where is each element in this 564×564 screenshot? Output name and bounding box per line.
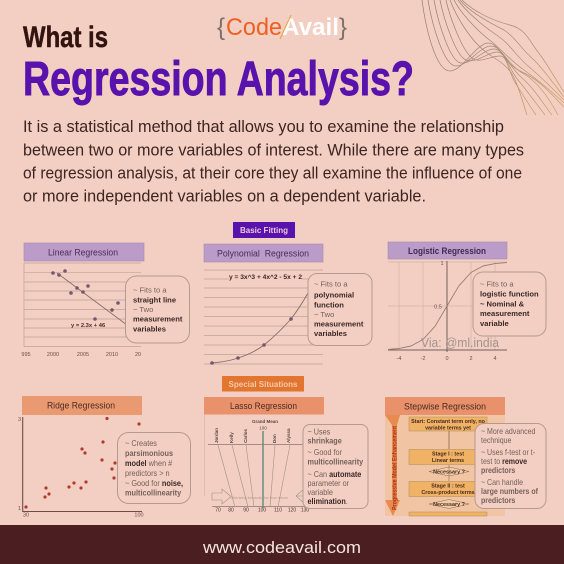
logo: CodeAvail: } xyxy=(339,14,347,41)
callout: stepwise: predictors xyxy=(481,466,515,475)
heading: stepwise regression: Stepwise Regression xyxy=(404,402,486,412)
sigmoid chart: logistic: 1 xyxy=(440,261,444,267)
logo: CodeAvail xyxy=(217,14,347,41)
intro paragraph: of regression analysis, at their core they all examine the influence of one xyxy=(23,164,522,182)
callout: ridge: predictors > n xyxy=(125,469,170,478)
forest-style chart: lasso: Alyssa xyxy=(286,428,291,443)
curve chart: polynomial xyxy=(204,270,323,365)
panel: linear regression xyxy=(21,243,190,358)
forest-style chart: lasso: 90 xyxy=(243,508,249,514)
callout: polynomial: function xyxy=(314,300,344,310)
sigmoid chart: logistic: 2 xyxy=(469,356,473,362)
panel: ridge regression xyxy=(18,396,190,518)
callout: stepwise: predictors xyxy=(481,496,515,505)
callout: logistic xyxy=(473,272,546,336)
flowchart backdrop: stepwise: Cross-product terms xyxy=(421,490,475,496)
forest-style chart: lasso xyxy=(204,414,309,514)
callout: polynomial: ~ Fits to a xyxy=(314,280,348,288)
flowchart backdrop: stepwise: variable terms yet xyxy=(425,426,471,432)
callout: linear: measurement xyxy=(133,314,183,324)
scatter chart: linear: 20 xyxy=(135,352,141,358)
logo: CodeAvail: Avail xyxy=(282,14,339,41)
forest-style chart: lasso: Don xyxy=(272,434,277,443)
footer band xyxy=(0,525,564,564)
heading: polynomial regression xyxy=(204,244,323,262)
sigmoid chart: logistic: 4 xyxy=(493,356,497,362)
curve chart: polynomial: y = 3x^3 + 4x^2 - 5x + 2 xyxy=(229,274,303,281)
scatter chart: linear: 995 xyxy=(21,352,31,358)
forest-style chart: lasso: Carlos xyxy=(243,428,248,443)
scatter chart: linear: y = 2.3x + 46 xyxy=(71,323,106,329)
heading: ridge regression xyxy=(22,396,142,415)
callout: ridge: ~ Creates xyxy=(125,439,157,448)
forest-style chart: lasso: 120 xyxy=(288,508,296,514)
forest-style chart: lasso: 100 xyxy=(258,508,266,514)
sigmoid chart: logistic: 0 xyxy=(445,356,449,362)
flowchart backdrop: stepwise: Linear terms xyxy=(432,458,464,464)
callout: lasso: variable xyxy=(308,488,333,497)
callout: ridge xyxy=(118,432,190,504)
panel: stepwise regression xyxy=(385,397,546,516)
heading: linear regression xyxy=(24,243,144,261)
forest-style chart: lasso: 70 xyxy=(215,508,221,514)
callout: ridge: multicollinearity xyxy=(125,488,182,498)
callout: lasso: parameter or xyxy=(308,479,349,488)
watermark: Via @ml.india: Via: @ml.india xyxy=(421,336,499,350)
callout: stepwise xyxy=(475,424,546,508)
callout: polynomial: variables xyxy=(314,329,347,338)
callout: linear xyxy=(126,276,190,343)
flowchart backdrop: stepwise: Necessary ? xyxy=(433,502,465,508)
forest-style chart: lasso: 130 xyxy=(301,508,309,514)
intro paragraph: between two or more variables of interest. While there are many types xyxy=(23,142,524,160)
flowchart backdrop: stepwise: Necessary ? xyxy=(433,470,465,476)
callout: logistic: ~ Fits to a xyxy=(480,280,514,288)
forest-style chart: lasso: Grand Mean xyxy=(252,419,278,424)
logo: CodeAvail: Code xyxy=(226,14,282,41)
forest-style chart: lasso: 100 xyxy=(259,426,267,430)
callout: logistic: logistic function xyxy=(480,290,539,298)
heading: polynomial regression: Polynomial Regression xyxy=(217,248,309,260)
forest-style chart: lasso: Kelly xyxy=(229,432,234,443)
forest-style chart: lasso: 80 xyxy=(228,508,234,514)
sigmoid chart: logistic xyxy=(388,261,507,362)
heading: lasso regression: Lasso Regression xyxy=(230,401,297,412)
decorative wave lines xyxy=(422,0,564,115)
callout: linear: ~ Fits to a xyxy=(133,286,167,294)
callout: ridge: parsimonious xyxy=(125,449,173,458)
callout: linear: ~ Two xyxy=(133,305,153,314)
title: What is: What is xyxy=(23,21,108,54)
sigmoid chart: logistic: -2 xyxy=(421,356,425,362)
panel: logistic regression xyxy=(388,242,546,362)
scatter chart: ridge: 3 xyxy=(18,417,21,423)
forest-style chart: lasso: 110 xyxy=(274,508,282,514)
footer url: www.codeavail.com xyxy=(202,538,361,557)
callout: logistic: measurement xyxy=(480,309,530,318)
scatter chart: ridge: 1 xyxy=(18,506,21,512)
callout: stepwise: large numbers of xyxy=(481,487,538,496)
callout: lasso: ~ Good for xyxy=(308,448,342,457)
flowchart backdrop: stepwise: Start: Constant term only, no xyxy=(411,419,486,425)
flowchart backdrop: stepwise: Progressive Model Enhancement xyxy=(392,426,398,510)
callout: stepwise: test to remove xyxy=(481,457,527,466)
heading: stepwise regression xyxy=(385,397,505,415)
panel: polynomial regression xyxy=(204,244,372,365)
callout: lasso: ~ Uses xyxy=(308,427,330,437)
heading: linear regression: Linear Regression xyxy=(48,248,118,258)
scatter chart: linear xyxy=(21,263,141,358)
heading: logistic regression xyxy=(388,242,507,259)
callout: logistic: variable xyxy=(480,319,509,328)
callout: logistic: ~ Nominal & xyxy=(480,300,525,308)
flowchart backdrop: stepwise xyxy=(385,415,505,516)
callout: ridge: model when # xyxy=(125,459,173,468)
flowchart backdrop: stepwise: Stage I : test xyxy=(432,452,464,458)
callout: ridge: ~ Good for noise, xyxy=(125,479,183,488)
scatter chart: ridge: 30 xyxy=(23,512,29,518)
sigmoid chart: logistic: 0.5 xyxy=(434,304,442,310)
callout: polynomial: ~ Two xyxy=(314,310,334,319)
forest-style chart: lasso: Shrinking towards the true mean xyxy=(230,495,288,500)
callout: lasso: ~ Can automate xyxy=(308,470,361,479)
flowchart backdrop: stepwise: Stage II : test xyxy=(431,484,465,490)
callout: polynomial: measurement xyxy=(314,320,364,328)
heading: ridge regression: Ridge Regression xyxy=(47,400,115,412)
scatter chart: ridge xyxy=(18,417,144,518)
scatter chart: ridge: 100 xyxy=(134,512,144,518)
forest-style chart: lasso: Jordan xyxy=(214,428,219,443)
label: Basic Fitting xyxy=(233,222,295,238)
scatter chart: linear: 2005 xyxy=(77,352,89,358)
label: Basic Fitting: Basic Fitting xyxy=(240,226,288,235)
intro paragraph: or more independent variables on a dependent variable. xyxy=(23,188,426,206)
callout: lasso xyxy=(303,424,368,508)
heading: lasso regression xyxy=(204,397,324,414)
sigmoid chart: logistic: -4 xyxy=(397,356,401,362)
callout: stepwise: ~ Uses f-test or t- xyxy=(481,448,536,457)
label: Special Situations: Special Situations xyxy=(229,380,298,389)
callout: lasso: shrinkage xyxy=(308,436,342,446)
callout: stepwise: ~ Can handle xyxy=(481,478,523,487)
scatter chart: linear: 2000 xyxy=(47,352,59,358)
panel: lasso regression xyxy=(204,397,368,514)
callout: linear: variables xyxy=(133,324,166,334)
label: Special Situations xyxy=(222,376,304,392)
callout: polynomial: polynomial xyxy=(314,290,354,300)
callout: lasso: multicollinearity xyxy=(308,457,364,467)
intro paragraph: It is a statistical method that allows you to examine the relationship xyxy=(23,118,504,136)
callout: lasso: elimination. xyxy=(308,497,348,506)
callout: polynomial xyxy=(308,274,372,346)
logo: CodeAvail: { xyxy=(217,14,225,41)
callout: stepwise: technique xyxy=(481,436,511,445)
callout: stepwise: ~ More advanced xyxy=(481,427,535,436)
scatter chart: linear: 2010 xyxy=(106,352,118,358)
title: Regression Analysis?: Regression Analysis? xyxy=(23,53,414,106)
callout: linear: straight line xyxy=(133,296,176,304)
heading: logistic regression: Logistic Regression xyxy=(408,246,486,257)
intro paragraph xyxy=(23,118,524,206)
